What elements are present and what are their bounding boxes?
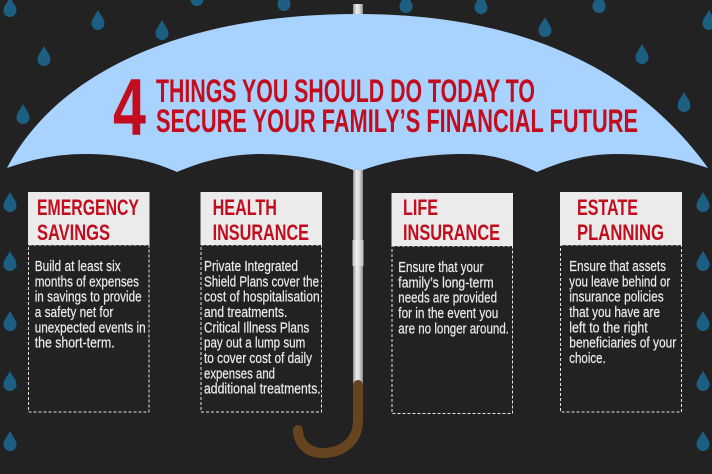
body text: to cover cost of daily: [204, 350, 312, 367]
body text: [398, 259, 509, 337]
body text: Ensure that assets: [569, 258, 666, 275]
panel: estate planning: [560, 192, 682, 412]
heading: [403, 195, 500, 245]
heading: [213, 195, 309, 245]
body text: unexpected events in: [35, 319, 146, 336]
body text: Shield Plans cover the: [204, 273, 319, 290]
umbrella canopy: [7, 14, 708, 172]
body text: beneficiaries of your: [569, 335, 676, 352]
body text: the short-term.: [35, 335, 115, 352]
body text: Build at least six: [35, 258, 121, 275]
body text: months of expenses: [35, 273, 139, 290]
body text: [204, 258, 321, 398]
panel: life insurance: [392, 193, 513, 414]
body text: additional treatments.: [204, 381, 321, 398]
heading box: [392, 193, 513, 246]
title line 1: THINGS YOU SHOULD DO TODAY TO: [156, 73, 535, 109]
body text: for in the event you: [398, 305, 498, 322]
heading: [37, 195, 139, 245]
umbrella shaft: [353, 4, 363, 385]
heading box: [560, 192, 682, 245]
body text: left to the right: [569, 319, 648, 336]
body text: choice.: [569, 350, 606, 367]
body text: insurance policies: [569, 289, 664, 306]
body text: expenses and: [204, 365, 275, 382]
umbrella shaft lower: [353, 170, 363, 385]
heading: EMERGENCY: [37, 195, 139, 220]
panel outline: [560, 245, 682, 412]
body text: Critical Illness Plans: [204, 319, 309, 336]
umbrella handle: [298, 385, 358, 453]
heading: LIFE: [403, 195, 438, 220]
body text: that you have are: [569, 304, 660, 321]
umbrella runner: [352, 240, 364, 266]
panel: health insurance: [200, 192, 322, 412]
body text: in savings to provide: [35, 289, 142, 306]
heading box: [28, 192, 150, 245]
body text: Private Integrated: [204, 258, 298, 275]
body text: cost of hospitalisation: [204, 289, 320, 306]
heading box: [200, 192, 322, 245]
heading: [577, 195, 664, 245]
body text: [569, 258, 676, 367]
panel outline: [28, 245, 149, 412]
heading: INSURANCE: [403, 220, 500, 245]
body text: you leave behind or: [569, 273, 670, 290]
body text: a safety net for: [35, 304, 113, 321]
body text: and treatments.: [204, 304, 287, 321]
panel outline: [392, 246, 512, 414]
panel: emergency savings: [28, 192, 150, 412]
heading: ESTATE: [577, 195, 638, 220]
heading: INSURANCE: [213, 220, 309, 245]
title: [113, 63, 638, 153]
heading: PLANNING: [577, 220, 664, 245]
big number 4: 4: [113, 63, 146, 153]
heading: HEALTH: [213, 195, 277, 220]
panel outline: [201, 245, 322, 412]
body text: family’s long-term: [398, 274, 494, 291]
body text: needs are provided: [398, 290, 497, 307]
body text: Ensure that your: [398, 259, 483, 276]
body text: [35, 258, 146, 352]
body text: are no longer around.: [398, 320, 509, 337]
body text: pay out a lump sum: [204, 335, 305, 352]
heading: SAVINGS: [37, 220, 110, 245]
